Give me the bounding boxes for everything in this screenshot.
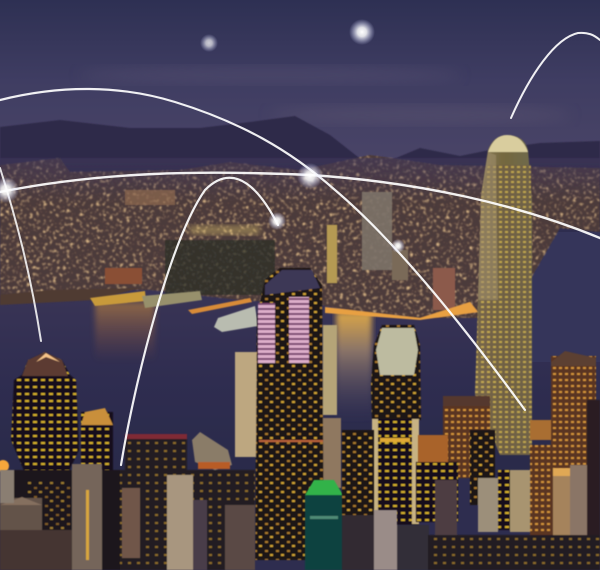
foreground mid-left blocks: [0, 432, 255, 570]
city band across harbour: [0, 155, 600, 320]
arc: left edge: [0, 168, 41, 341]
harbour water: [0, 232, 600, 475]
arc: upper right: [511, 33, 600, 118]
arc: inner link: [121, 178, 278, 465]
network arcs: [0, 33, 600, 465]
arc: long sweep across skyline: [0, 89, 525, 410]
twin-crown tower centre: [371, 325, 421, 525]
network nodes: [0, 19, 405, 253]
left tower: [0, 352, 113, 490]
two IFC tower: [475, 135, 532, 455]
sky: [0, 0, 600, 180]
arc: horizontal link: [0, 173, 600, 238]
ferries at pier: [90, 291, 258, 332]
green-lit rooftop building: [305, 480, 343, 570]
mountains: [0, 116, 600, 200]
foreground right blocks: [342, 400, 600, 570]
tan tower and central skyscraper: [235, 268, 341, 560]
right waterfront blocks: [443, 351, 596, 490]
